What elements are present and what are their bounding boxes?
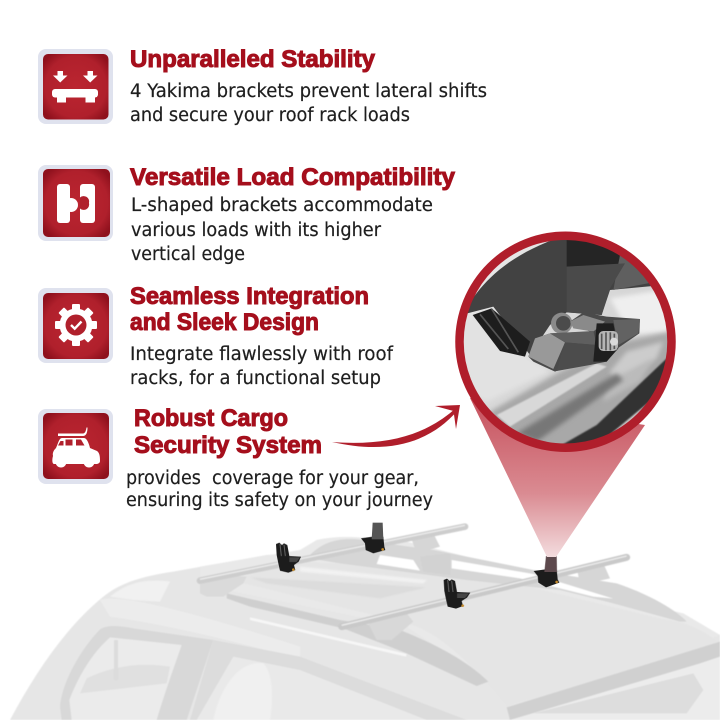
front windshield strip [507,642,720,720]
side window [190,640,467,720]
near roof rail [227,593,488,686]
body text: racks, for a functional setup [130,368,381,389]
body text: L-shaped brackets accommodate [131,195,433,216]
callout cone [470,398,645,557]
bracket 3 [444,579,470,609]
roof panel [230,562,718,707]
heading [134,405,322,459]
car roof photo [10,523,720,720]
item 4: security [38,405,433,511]
far cross bar [200,527,465,581]
body text [131,195,433,265]
heading: Versatile Load Compatibility [130,164,456,191]
icon: bracket with arrows [38,49,113,124]
item 2: compatibility [38,164,456,265]
body text: various loads with its higher [131,220,381,241]
icon: L brackets [38,165,113,241]
body text [130,81,487,126]
heading: Unparalleled Stability [130,46,376,73]
item 1: stability [38,46,487,126]
left window [60,626,213,720]
curved arrow [332,405,460,447]
roof base [288,537,716,633]
bracket 1 [276,543,301,573]
far roof rail [310,539,687,622]
wing nut [528,312,640,372]
heading: Seamless Integration [130,283,369,310]
item 3: integration [38,283,393,389]
bracket 2 [361,523,385,553]
near cross bar [342,557,627,627]
icon: gear with check [38,288,113,363]
icon: car with roof rack [38,409,113,484]
body text [130,344,393,389]
body text [126,468,433,511]
body text: provides coverage for your gear, [126,468,419,489]
heading: and Sleek Design [130,309,319,336]
heading: Security System [134,432,322,459]
body text: Integrate flawlessly with roof [130,344,393,365]
heading [130,283,369,336]
body text: ensuring its safety on your journey [126,490,433,511]
body text: vertical edge [131,244,245,265]
rack feet [200,576,246,596]
bracket 4 [534,556,559,587]
body text: 4 Yakima brackets prevent lateral shifts [130,81,487,102]
heading: Robust Cargo [134,405,288,432]
car body base [10,547,720,720]
body text: and secure your roof rack loads [130,105,410,126]
zoom photo circle [450,225,690,465]
